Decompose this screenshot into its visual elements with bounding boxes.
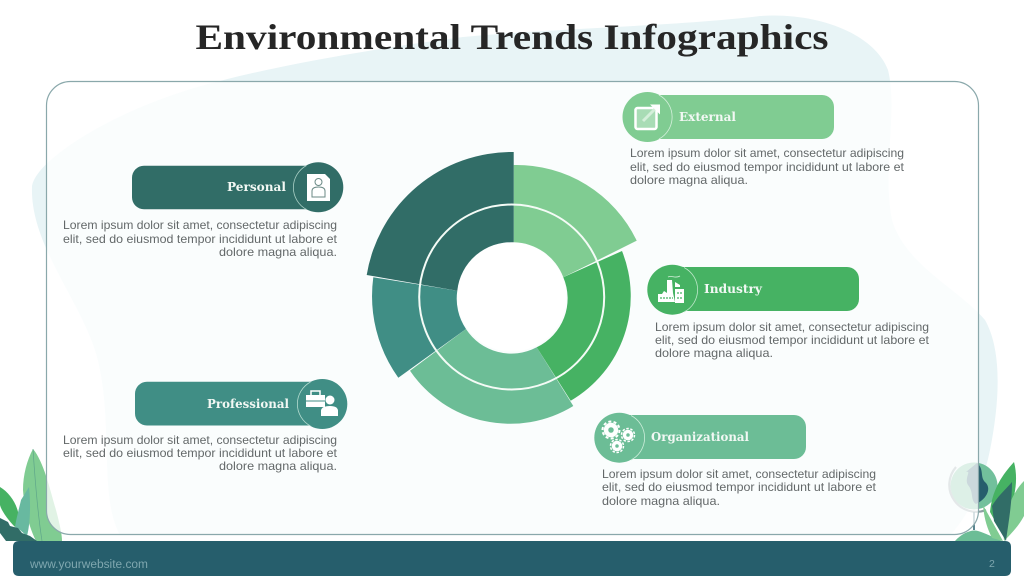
description: Lorem ipsum dolor sit amet, consectetur adipiscing [655,321,929,334]
right plant and globe [949,462,1024,541]
description: dolore magna aliqua. [219,460,337,473]
icon: document person [307,174,330,201]
description: dolore magna aliqua. [219,246,337,259]
label: External [679,110,736,124]
label: Professional [207,397,289,411]
segment: external [514,165,637,277]
callout: industry [647,265,930,360]
icon: briefcase and person [306,391,338,416]
description [655,321,930,360]
description: elit, sed do eiusmod tempor incididunt ut labore et [630,161,905,174]
callout: professional [63,379,347,473]
title: Environmental Trends Infographics [196,17,828,57]
segment: organizational [410,329,573,424]
description: elit, sed do eiusmod tempor incididunt ut labore et [63,233,338,246]
description [630,147,905,187]
icon: external link [636,104,660,129]
description: dolore magna aliqua. [602,495,720,508]
page number: 2 [989,558,995,570]
segment: personal [367,152,514,291]
description [602,468,877,508]
description: elit, sed do eiusmod tempor incididunt ut labore et [63,447,338,460]
label: Industry [704,282,763,296]
sunburst chart [367,152,637,424]
footer bar [13,541,1011,576]
website: www.yourwebsite.com [29,559,148,571]
description: Lorem ipsum dolor sit amet, consectetur adipiscing [602,468,876,481]
callout: external [622,92,905,187]
centre hole [457,242,566,352]
inner ring [419,204,604,390]
description: Lorem ipsum dolor sit amet, consectetur adipiscing [630,147,904,160]
main panel [46,82,978,534]
label: Personal [227,180,286,194]
label: Organizational [651,430,749,444]
icon: factory [658,276,684,303]
description: Lorem ipsum dolor sit amet, consectetur adipiscing [63,219,337,232]
callout: organizational [594,413,877,508]
icon: gears [602,422,634,452]
left plant [0,449,62,541]
description: elit, sed do eiusmod tempor incididunt ut labore et [602,481,877,494]
description: elit, sed do eiusmod tempor incididunt ut labore et [655,334,930,347]
description [63,434,338,473]
segment: professional [372,277,466,378]
segment: industry [537,251,631,401]
description: dolore magna aliqua. [630,174,748,187]
description: Lorem ipsum dolor sit amet, consectetur adipiscing [63,434,337,447]
callout: personal [63,162,343,259]
description [63,219,338,259]
description: dolore magna aliqua. [655,347,773,360]
